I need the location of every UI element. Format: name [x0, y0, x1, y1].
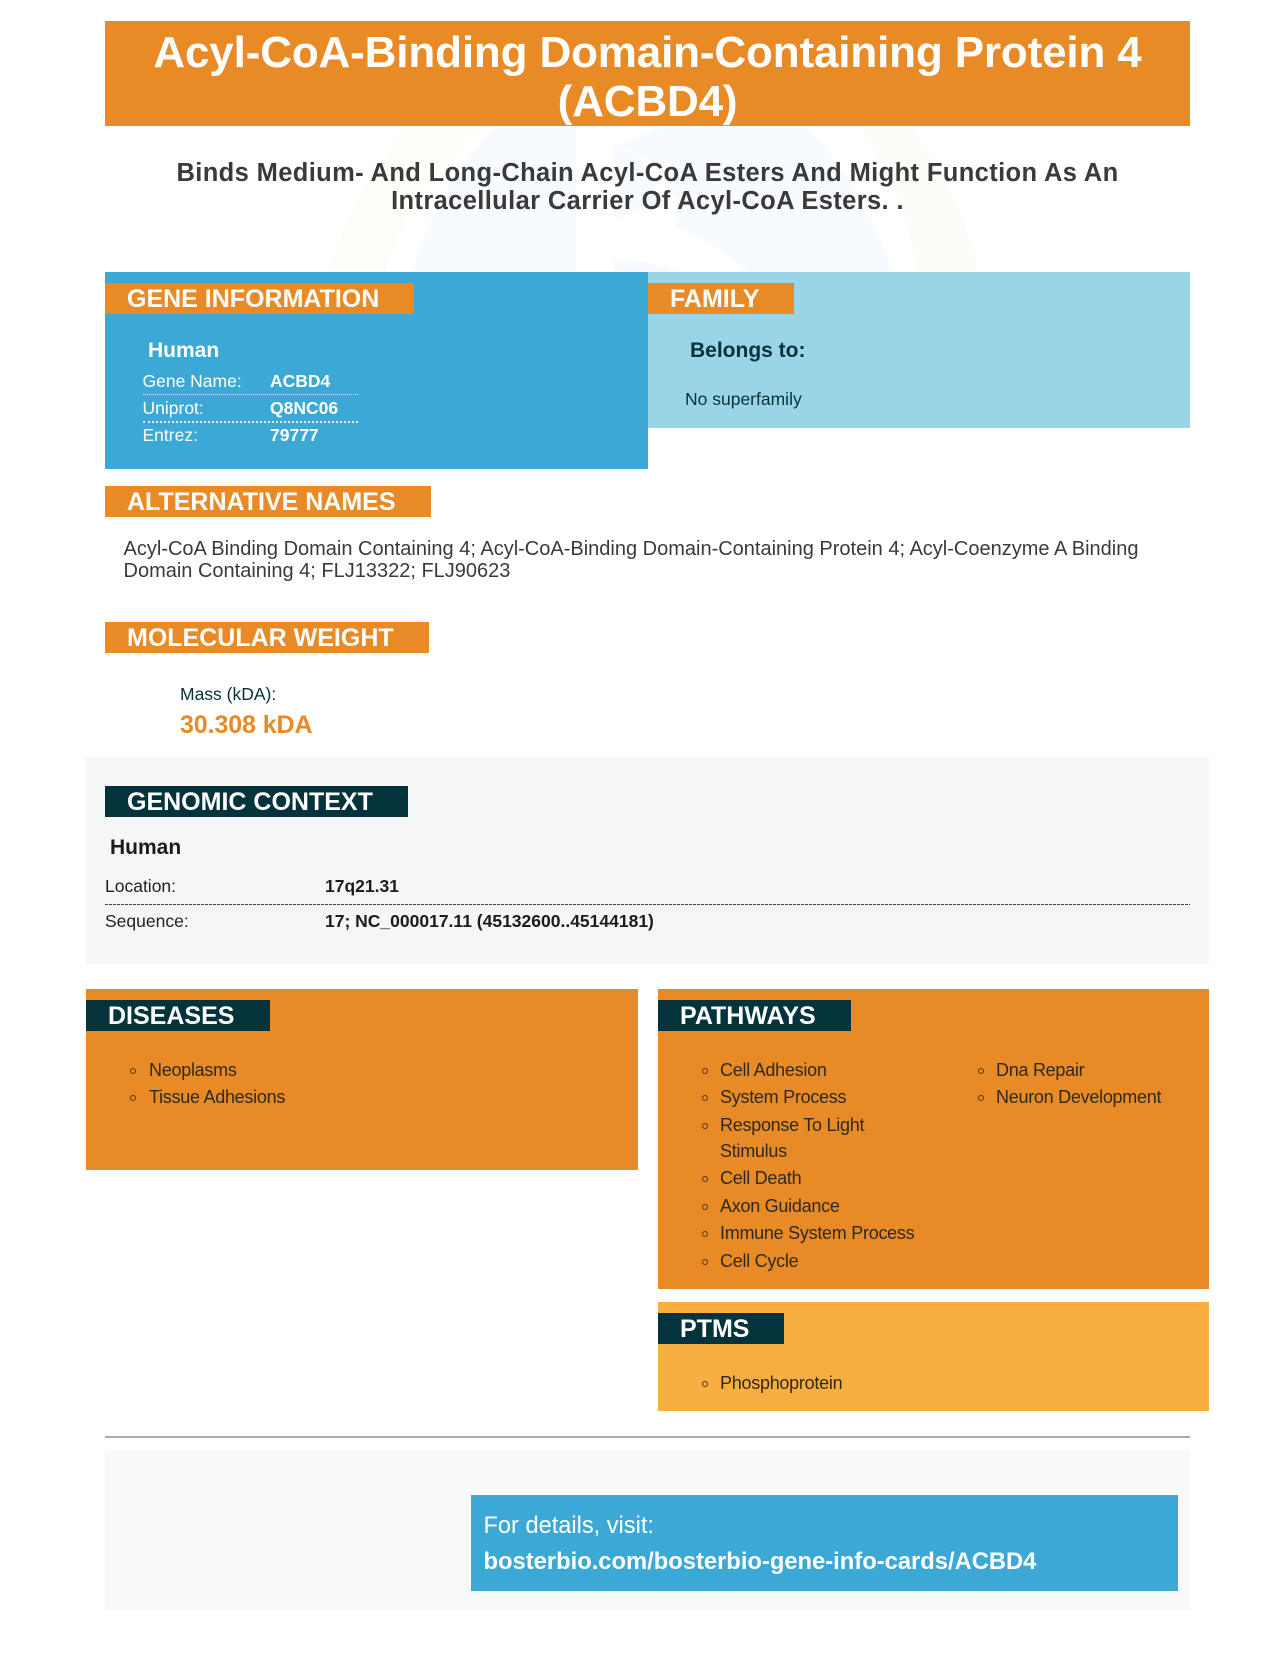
callout: visit link	[471, 1495, 1178, 1591]
uniprot row: Uniprot:	[142, 398, 204, 418]
mass label: Mass (kDA):	[180, 684, 276, 704]
diseases list: Tissue Adhesions	[149, 1087, 285, 1107]
heading: pathways: PATHWAYS	[680, 1002, 816, 1030]
pathways list: Cell Cycle	[720, 1251, 798, 1271]
visit label: For details, visit:	[484, 1513, 654, 1539]
alternative names text: Acyl-CoA Binding Domain Containing 4; Acyl-CoA-Binding Domain-Containing Protein 4; Acyl-Coenzyme A Binding	[124, 538, 1138, 560]
pathways list: Neuron Development	[996, 1087, 1161, 1107]
heading: family: FAMILY	[670, 285, 759, 313]
heading: ptms	[658, 1313, 784, 1344]
heading: pathways	[658, 1000, 851, 1031]
panel: ptms	[658, 1302, 1209, 1411]
location value: 17q21.31	[325, 876, 399, 896]
mass value: 30.308 kDA	[180, 711, 312, 739]
gene name row	[142, 366, 358, 395]
heading: diseases	[86, 1000, 270, 1031]
subtitle: Intracellular Carrier Of Acyl-CoA Esters. .	[391, 187, 904, 215]
pathways list: Dna Repair	[996, 1060, 1084, 1080]
belongs to label: Belongs to:	[690, 339, 806, 362]
uniprot row	[142, 393, 358, 423]
panel: genomic context	[86, 757, 1209, 964]
diseases list: Neoplasms	[149, 1060, 237, 1080]
uniprot row: Q8NC06	[270, 398, 338, 418]
species label: Human	[110, 836, 181, 859]
sequence label: Sequence:	[105, 911, 189, 931]
pathways list: Response To Light	[720, 1115, 864, 1135]
pathways list: Axon Guidance	[720, 1196, 840, 1216]
pathways list	[702, 1060, 1162, 1271]
title banner: Acyl-CoA-Binding Domain-Containing Protein 4	[153, 28, 1142, 77]
alternative names text	[124, 538, 1138, 582]
pathways list: Immune System Process	[720, 1223, 914, 1243]
heading: genomic context: GENOMIC CONTEXT	[127, 788, 373, 816]
watermark logo	[300, 126, 1000, 272]
heading: alternative names: ALTERNATIVE NAMES	[127, 488, 396, 516]
pathways list: Stimulus	[720, 1141, 787, 1161]
gene name row: ACBD4	[270, 371, 330, 391]
heading: ptms: PTMS	[680, 1315, 749, 1343]
sequence value: 17; NC_000017.11 (45132600..45144181)	[325, 911, 654, 931]
no superfamily text: No superfamily	[685, 389, 802, 409]
url: bosterbio.com/bosterbio-gene-info-cards/ACBD4	[484, 1548, 1036, 1575]
panel: family	[648, 272, 1190, 428]
pathways list: Cell Death	[720, 1168, 801, 1188]
panel: gene information	[105, 272, 648, 469]
panel: diseases	[86, 989, 638, 1170]
entrez row: 79777	[270, 425, 319, 445]
ptms list: Phosphoprotein	[720, 1373, 842, 1393]
panel: footer	[105, 1450, 1190, 1610]
heading: diseases: DISEASES	[108, 1002, 234, 1030]
subtitle: Binds Medium- And Long-Chain Acyl-CoA Esters And Might Function As An	[176, 159, 1119, 187]
heading: family	[648, 283, 794, 314]
title banner	[105, 21, 1190, 126]
entrez row	[142, 425, 319, 445]
entrez row: Entrez:	[142, 425, 198, 445]
alternative names text: Domain Containing 4; FLJ13322; FLJ90623	[124, 560, 510, 582]
heading: molecular weight: MOLECULAR WEIGHT	[127, 624, 394, 652]
panel: pathways	[658, 989, 1209, 1289]
pathways list: Cell Adhesion	[720, 1060, 827, 1080]
title banner: (ACBD4)	[558, 76, 737, 126]
heading: gene information: GENE INFORMATION	[127, 285, 379, 313]
gene name row: Gene Name:	[142, 371, 242, 391]
species label: Human	[148, 339, 219, 362]
location label: Location:	[105, 876, 176, 896]
pathways list: System Process	[720, 1087, 846, 1107]
subtitle	[176, 159, 1119, 215]
diseases list	[130, 1060, 285, 1107]
